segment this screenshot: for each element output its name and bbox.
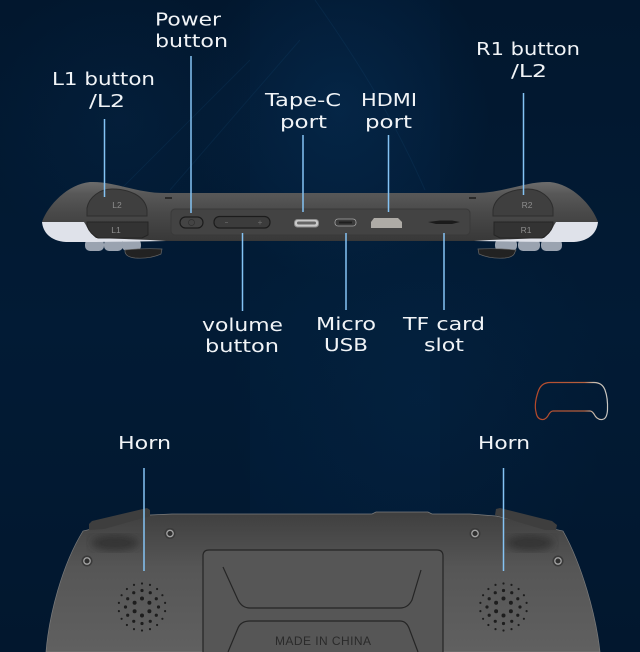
leader: Type-C port <box>302 135 304 212</box>
port panel <box>171 209 470 235</box>
label: TF card slot: slot <box>424 335 464 356</box>
label: power button <box>155 10 228 52</box>
leader: L1 button <box>104 119 106 197</box>
label: L1 button <box>52 69 155 112</box>
label: micro USB: Micro <box>316 314 376 335</box>
right thumbstick <box>478 249 516 258</box>
left bumper <box>89 508 150 530</box>
label: left horn: Horn <box>118 433 171 454</box>
R1 button <box>494 222 553 238</box>
L2 button <box>87 189 147 216</box>
label: R1 button <box>476 39 580 82</box>
USB-C port <box>294 220 318 227</box>
label: micro USB: USB <box>324 335 368 356</box>
right bumper <box>495 508 557 530</box>
R2 button <box>493 189 553 216</box>
leader: left horn <box>143 468 145 571</box>
leader: volume button <box>242 233 244 311</box>
label: HDMI port: HDMI <box>361 90 417 111</box>
label: right horn: Horn <box>478 433 530 454</box>
left speaker <box>119 584 165 630</box>
label: Type-C port: port <box>280 112 327 133</box>
leader: R1 button <box>522 93 524 195</box>
battery cover <box>203 550 443 652</box>
L2 button: L2 <box>112 200 122 210</box>
right speaker <box>480 584 527 630</box>
leader: TF card slot <box>443 233 445 310</box>
label: L1 button: L1 button <box>52 69 155 90</box>
leader: HDMI port <box>388 135 390 212</box>
back shell <box>46 512 600 652</box>
label: R1 button: /L2 <box>511 61 547 82</box>
label: R1 button: R1 button <box>476 39 580 60</box>
label: volume button <box>202 315 283 357</box>
device top view <box>42 182 598 258</box>
HDMI port <box>371 218 402 228</box>
top vents <box>165 197 476 199</box>
volume button <box>214 216 270 228</box>
leader: right horn <box>502 468 504 571</box>
label: power button: button <box>155 31 228 52</box>
screws <box>82 528 564 566</box>
icon: console outline <box>535 382 608 420</box>
R2 button: R2 <box>522 200 533 210</box>
label: volume button: button <box>205 336 279 357</box>
label: power button: Power <box>155 10 222 30</box>
grey stick bases <box>85 239 562 251</box>
TF card slot <box>428 220 460 224</box>
label: TF card slot <box>402 314 485 356</box>
leader: micro USB <box>345 233 347 310</box>
L1 button: L1 <box>111 225 121 235</box>
label: L1 button: /L2 <box>89 91 125 112</box>
label: Type-C port <box>264 90 341 133</box>
L1 button <box>87 222 148 238</box>
label: HDMI port <box>361 90 417 133</box>
micro USB port <box>335 219 356 226</box>
bumper shadows <box>91 535 139 551</box>
R1 button: R1 <box>521 225 532 235</box>
label: volume button: volume <box>202 315 283 336</box>
left thumbstick <box>125 249 162 258</box>
leader: power button <box>190 56 192 213</box>
white lower grips <box>42 222 598 242</box>
device back view <box>46 508 600 652</box>
label: micro USB <box>316 314 376 356</box>
body shell <box>42 182 598 241</box>
made in china text: MADE IN CHINA <box>275 634 371 648</box>
label: HDMI port: port <box>365 112 412 133</box>
label: Type-C port: Tape-C <box>264 90 341 111</box>
label: TF card slot: TF card <box>402 314 485 335</box>
power button <box>180 217 203 228</box>
